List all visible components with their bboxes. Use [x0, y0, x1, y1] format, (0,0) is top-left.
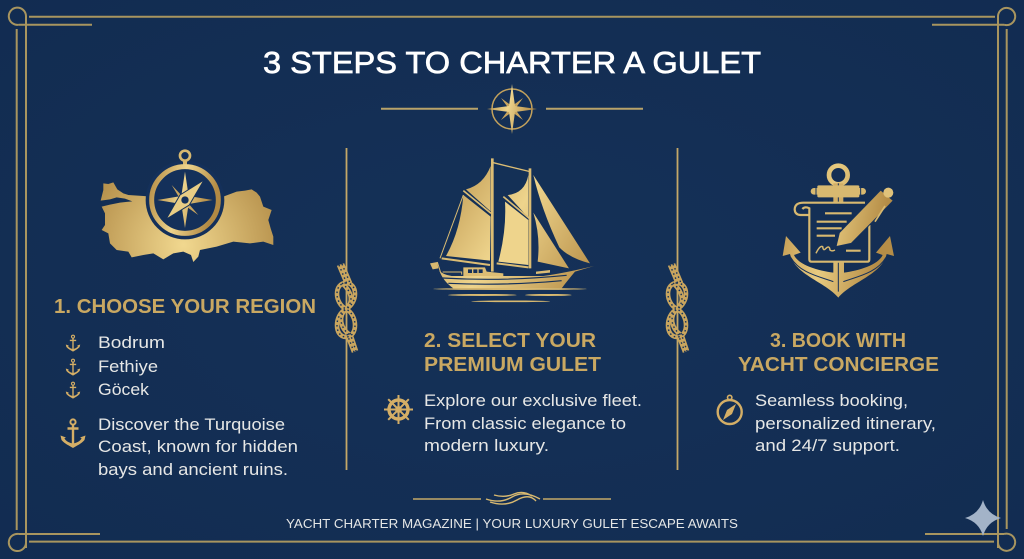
- title compass rose divider: [381, 84, 643, 134]
- description text: Coast, known for hidden: [98, 438, 298, 456]
- footer text: YACHT CHARTER MAGAZINE | YOUR LUXURY GULET ESCAPE AWAITS: [286, 516, 738, 531]
- description text: From classic elegance to: [424, 415, 626, 433]
- heading: 3. BOOK WITH: [770, 330, 906, 352]
- panel: step 1 choose your region: [54, 151, 316, 479]
- description text: [424, 392, 642, 455]
- description text: and 24/7 support.: [755, 437, 900, 455]
- list item: Göcek: [66, 381, 150, 399]
- heading: 1. CHOOSE YOUR REGION: [54, 296, 316, 318]
- icon: anchor with contract and pen: [783, 166, 894, 298]
- heading: [738, 330, 939, 376]
- description text: Seamless booking,: [755, 392, 908, 410]
- panel: step 2 select your premium gulet: [384, 158, 642, 455]
- icon: anchor: [60, 419, 86, 448]
- description text: modern luxury.: [424, 437, 549, 455]
- divider with knot: right: [668, 148, 687, 470]
- description text: Discover the Turquoise: [98, 416, 285, 434]
- description text: [98, 416, 298, 479]
- list item: Fethiye: [66, 358, 158, 376]
- list item: Bodrum: Bodrum: [98, 334, 165, 352]
- heading: YACHT CONCIERGE: [738, 354, 939, 376]
- icon: small compass: [718, 395, 742, 424]
- watermark sparkle: [965, 500, 1001, 536]
- icon: map of Turkey with compass: [101, 151, 273, 262]
- list item: Bodrum: [66, 334, 165, 352]
- description text: bays and ancient ruins.: [98, 461, 288, 479]
- list item: Fethiye: Fethiye: [98, 358, 158, 376]
- description text: Explore our exclusive fleet.: [424, 392, 642, 410]
- heading: [424, 330, 601, 376]
- description text: personalized itinerary,: [755, 415, 936, 433]
- heading: 2. SELECT YOUR: [424, 330, 597, 352]
- icon: gulet sailing ship: [430, 158, 594, 302]
- title: 3 STEPS TO CHARTER A GULET: [263, 45, 761, 80]
- icon: ship wheel: [384, 395, 413, 424]
- list item: Göcek: Göcek: [98, 381, 150, 399]
- divider with knot: left: [337, 148, 356, 470]
- panel: step 3 book with yacht concierge: [718, 166, 939, 455]
- footer wave divider: [413, 492, 611, 504]
- description text: [755, 392, 936, 455]
- heading: PREMIUM GULET: [424, 354, 601, 376]
